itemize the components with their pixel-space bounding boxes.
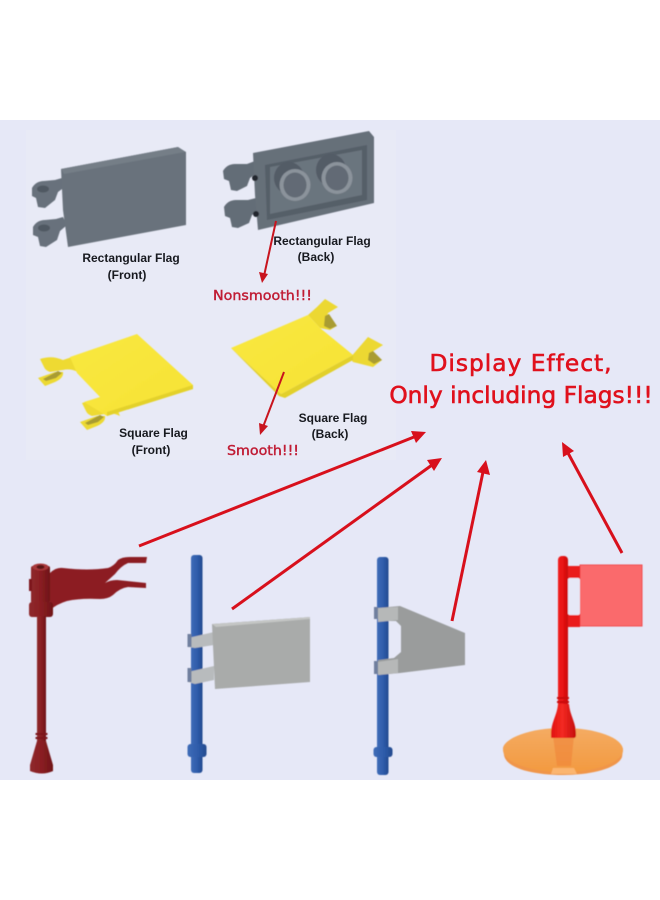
icon: blue pole with grey rectangular flag — [188, 555, 310, 773]
label: rectangular flag front — [82, 251, 180, 282]
label: rectangular flag front: Rectangular Flag — [82, 251, 180, 265]
label: square flag back: Square Flag — [299, 411, 367, 425]
heading: display effect — [389, 350, 653, 409]
label: square flag front: (Front) — [132, 443, 170, 457]
heading: display effect: Only including Flags!!! — [389, 382, 653, 409]
icon: rectangular flag front — [32, 147, 186, 247]
label: square flag front: Square Flag — [119, 426, 188, 440]
arrow: grey trapezoid flag to heading — [452, 460, 490, 621]
label: rectangular flag front: (Front) — [108, 268, 146, 282]
arrow: red flag to heading — [562, 442, 622, 553]
heading: display effect: Display Effect, — [429, 350, 613, 377]
label: rectangular flag back: (Back) — [298, 250, 334, 264]
background panel — [0, 120, 660, 780]
arrow: to smooth — [259, 372, 284, 435]
icon: square flag front — [38, 334, 193, 430]
label: nonsmooth: Nonsmooth!!! — [213, 289, 312, 304]
label: rectangular flag back — [273, 234, 371, 264]
icon: red flag on orange base — [503, 556, 642, 775]
label: square flag back — [299, 411, 367, 441]
arrow: dark red flag to heading — [139, 431, 426, 546]
label: square flag front — [119, 426, 188, 457]
label: rectangular flag back: Rectangular Flag — [273, 234, 371, 248]
icon: rectangular flag back — [223, 131, 374, 230]
arrow: to nonsmooth — [259, 221, 276, 283]
icon: dark red flag on pole — [29, 557, 147, 774]
icon: square flag back — [231, 299, 383, 398]
arrow: grey rectangular flag to heading — [232, 458, 442, 609]
icon: blue pole with grey trapezoid flag — [374, 557, 465, 775]
label: smooth: Smooth!!! — [227, 444, 299, 459]
label: square flag back: (Back) — [312, 427, 348, 441]
